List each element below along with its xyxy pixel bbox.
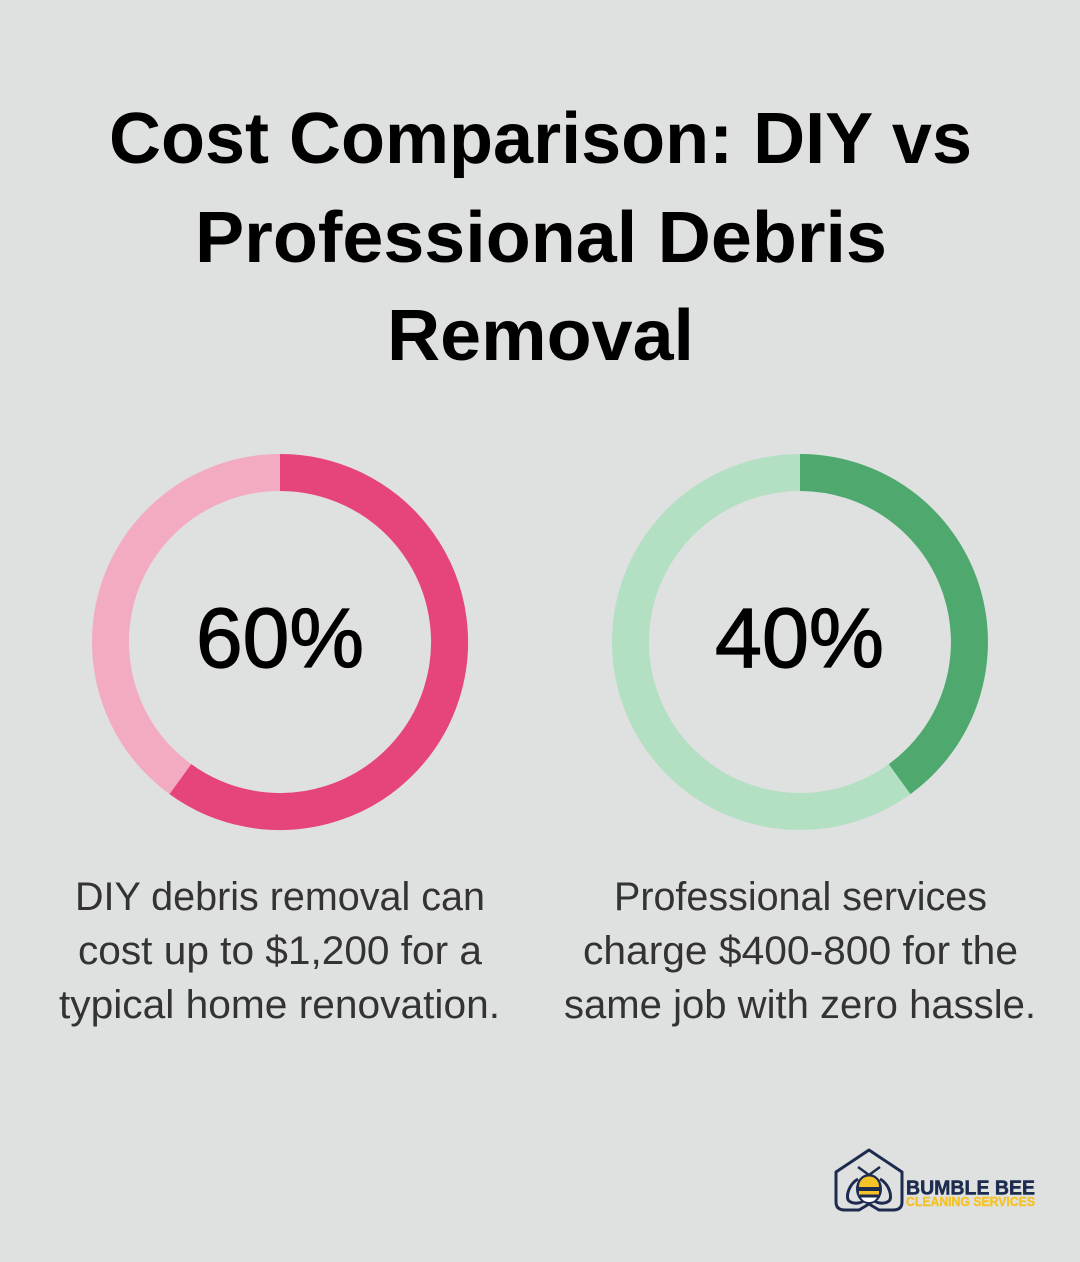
- donut chart: 40%: [630, 472, 970, 812]
- title: Professional Debris: [195, 198, 887, 278]
- text block: professional description: Professional services: [614, 875, 987, 919]
- icon: house with bee: [836, 1150, 902, 1210]
- stat: 60%: 60%: [196, 591, 364, 685]
- title: [109, 99, 972, 376]
- logo: Bumble Bee Cleaning Services: [836, 1150, 1035, 1210]
- text block: professional description: same job with zero hassle.: [564, 983, 1036, 1027]
- stat: 40%: 40%: [715, 591, 884, 685]
- text block: DIY description: DIY debris removal can: [75, 875, 485, 919]
- logo wordmark: BUMBLE BEE: [906, 1178, 1035, 1200]
- text block: DIY description: cost up to $1,200 for a: [78, 929, 483, 973]
- title: Cost Comparison: DIY vs: [109, 99, 972, 179]
- logo tagline: CLEANING SERVICES: [906, 1195, 1035, 1209]
- panel: DIY cost: [59, 472, 500, 1027]
- title: Removal: [387, 296, 694, 376]
- donut chart: 60%: [110, 472, 450, 812]
- text block: professional description: [564, 875, 1036, 1027]
- text block: DIY description: typical home renovation.: [59, 983, 500, 1027]
- text block: DIY description: [59, 875, 500, 1027]
- panel: professional cost: [564, 472, 1036, 1027]
- text block: professional description: charge $400-800 for the: [583, 929, 1018, 973]
